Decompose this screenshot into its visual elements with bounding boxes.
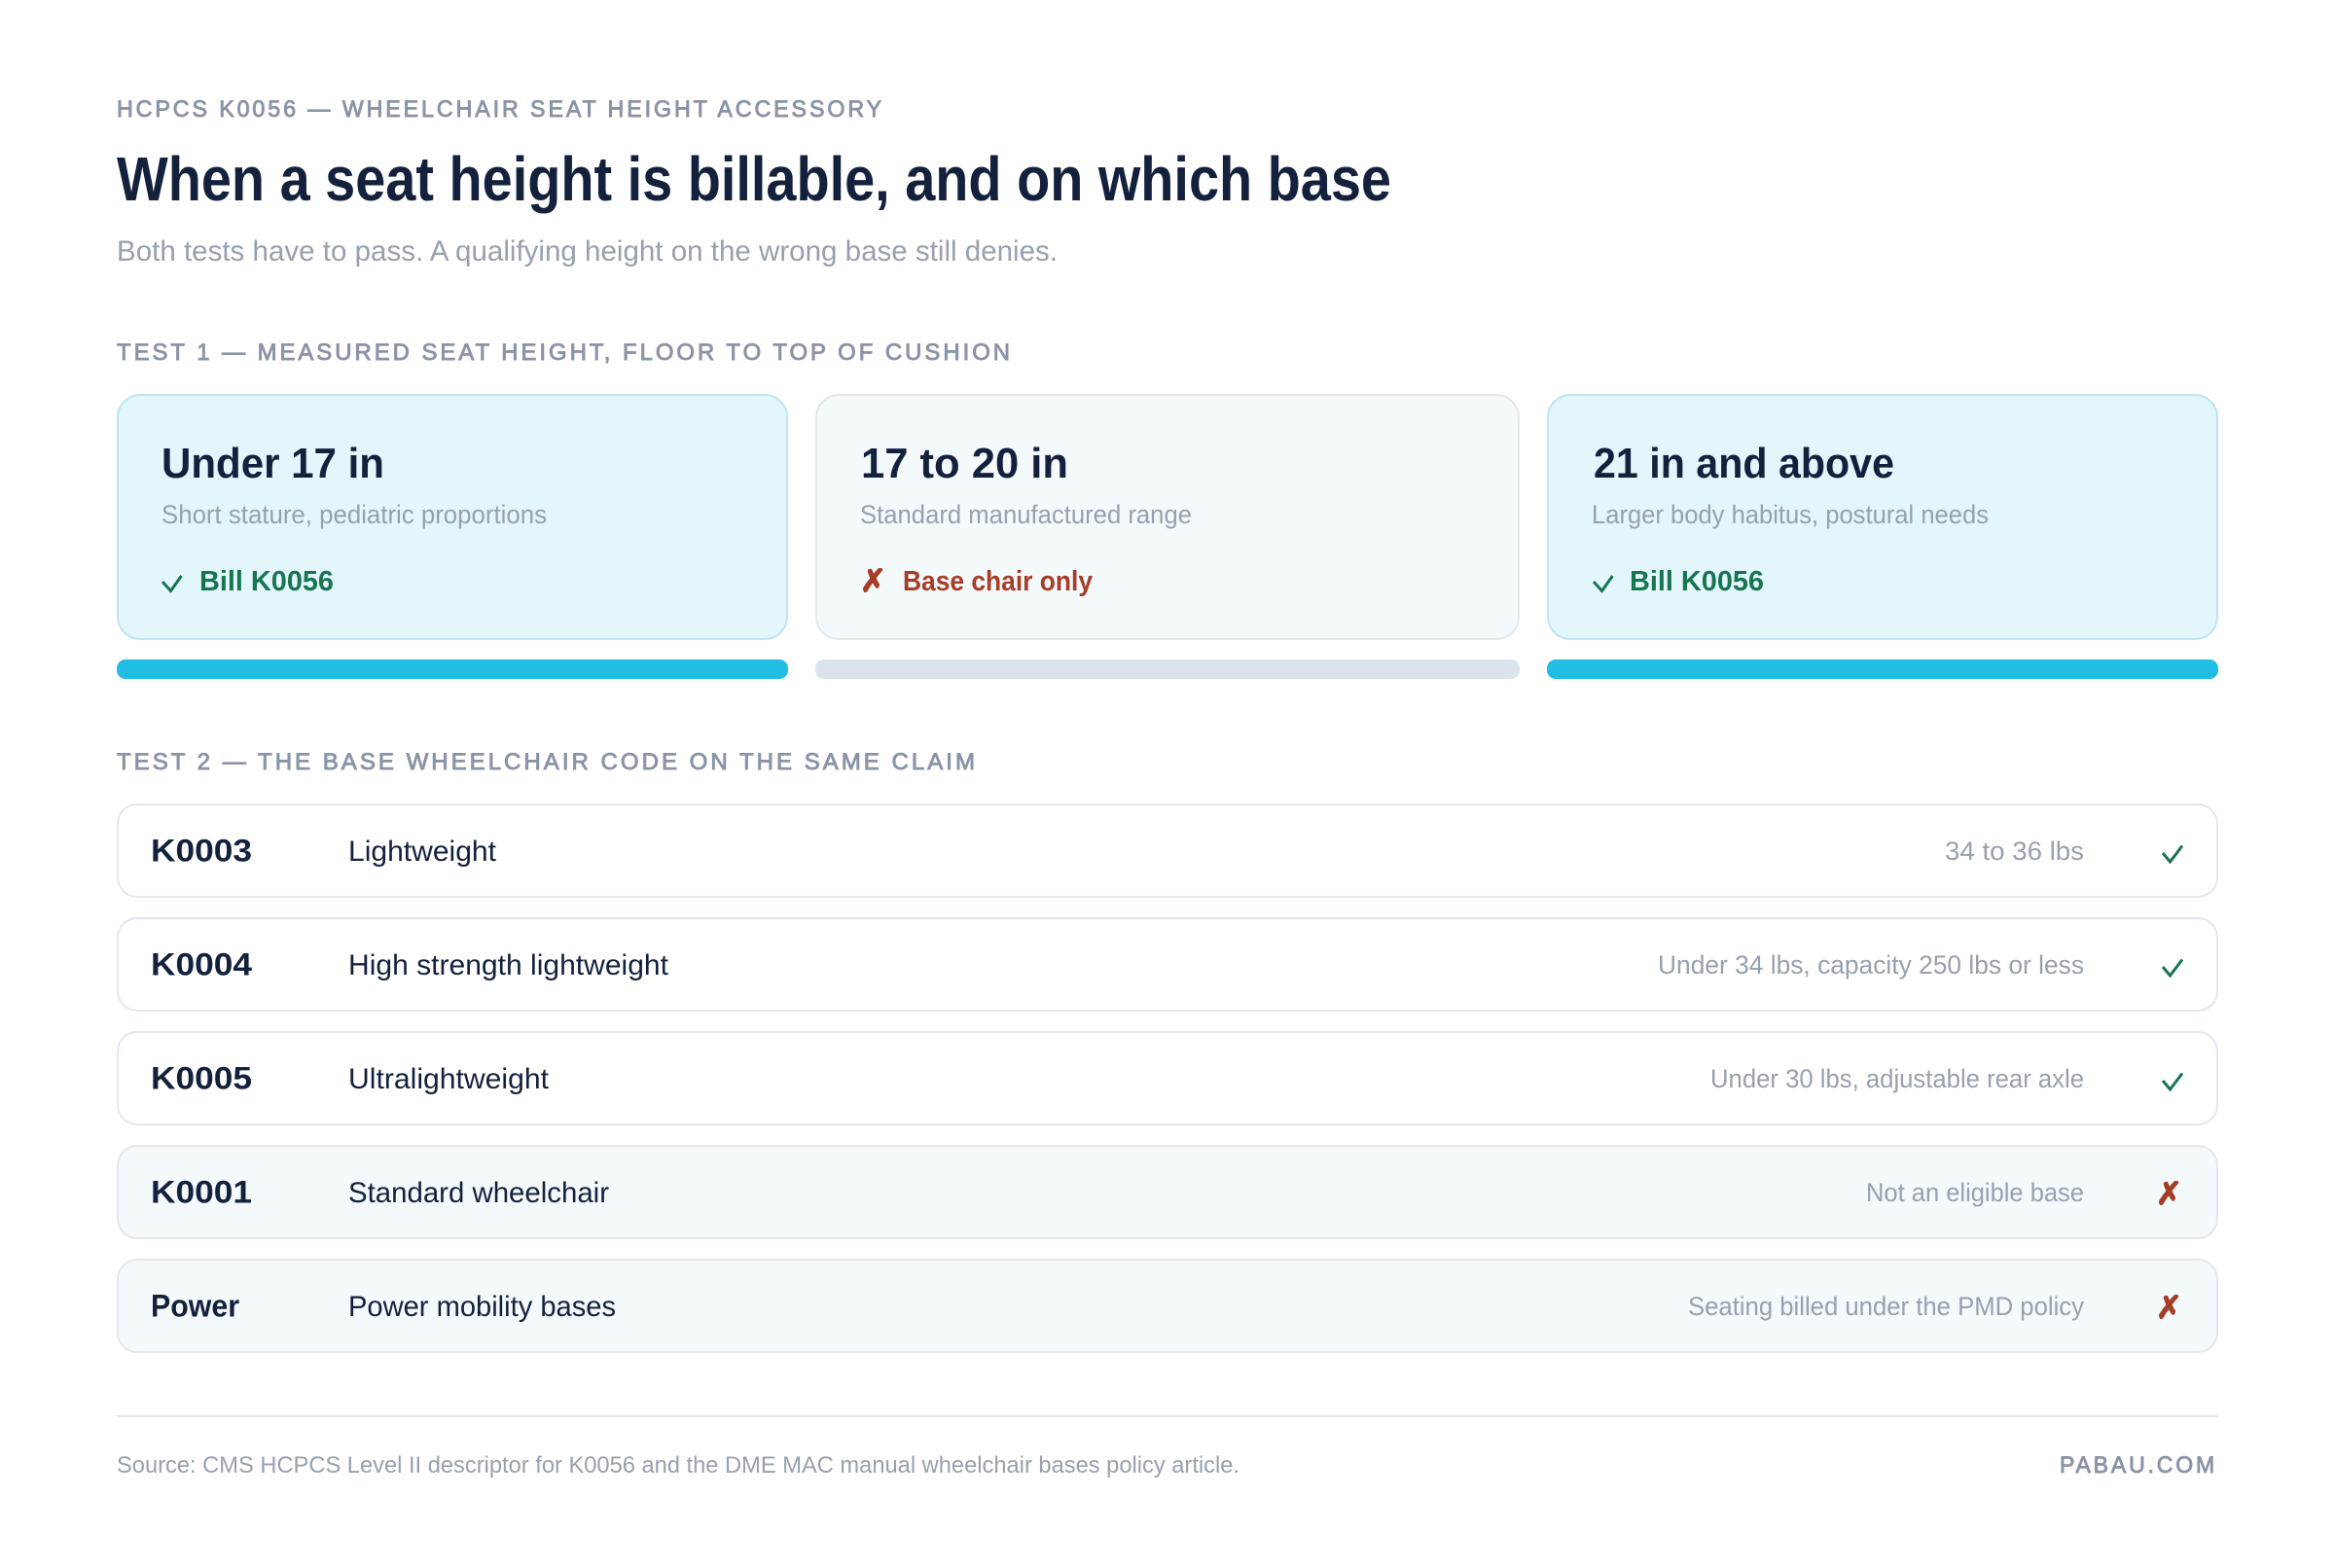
section heading: test 2: TEST 2 — THE BASE WHEELCHAIR CODE ON THE SAME CLAIM <box>117 749 978 775</box>
row background <box>118 1032 2217 1124</box>
detail: Seating billed under the PMD policy <box>1688 1292 2084 1321</box>
name: Standard wheelchair <box>348 1177 609 1209</box>
bar: 21 and above <box>1547 659 2218 679</box>
icon: cross: ✗ <box>860 562 886 599</box>
icon: check <box>2163 1074 2182 1089</box>
verdict: Base chair only <box>903 566 1093 597</box>
source note: Source: CMS HCPCS Level II descriptor for K0056 and the DME MAC manual wheelchair bases policy article. <box>117 1452 1239 1479</box>
brand: PABAU.COM <box>2060 1452 2217 1479</box>
section heading: test 1: TEST 1 — MEASURED SEAT HEIGHT, FLOOR TO TOP OF CUSHION <box>117 339 1013 366</box>
bar: 17 to 20 <box>815 659 1520 679</box>
icon: cross: ✗ <box>2156 1289 2182 1326</box>
row background <box>118 918 2217 1011</box>
row: Power <box>118 1260 2217 1352</box>
row: K0004 <box>118 918 2217 1011</box>
row background <box>118 804 2217 897</box>
verdict: Bill K0056 <box>1630 566 1764 597</box>
card heading: Under 17 in <box>162 440 384 487</box>
subtitle: Both tests have to pass. A qualifying height on the wrong base still denies. <box>117 235 1058 267</box>
detail: 34 to 36 lbs <box>1945 837 2084 866</box>
verdict: Bill K0056 <box>199 566 334 597</box>
code: Power <box>151 1288 239 1323</box>
detail: Not an eligible base <box>1866 1178 2084 1207</box>
detail: Under 34 lbs, capacity 250 lbs or less <box>1658 950 2084 980</box>
card heading: 21 in and above <box>1594 440 1894 487</box>
icon: check <box>162 576 181 591</box>
card background <box>1548 395 2217 639</box>
name: Ultralightweight <box>348 1063 550 1095</box>
eyebrow: HCPCS K0056 — WHEELCHAIR SEAT HEIGHT ACCESSORY <box>117 96 884 123</box>
card background <box>118 395 787 639</box>
row: K0005 <box>118 1032 2217 1124</box>
detail: Under 30 lbs, adjustable rear axle <box>1710 1064 2084 1093</box>
row: K0003 <box>118 804 2217 897</box>
name: Lightweight <box>348 836 497 868</box>
card description: Short stature, pediatric proportions <box>162 500 547 529</box>
card description: Larger body habitus, postural needs <box>1592 500 1989 529</box>
icon: check <box>2163 846 2182 862</box>
row background <box>118 1146 2217 1238</box>
icon: check <box>1594 576 1613 591</box>
row background <box>118 1260 2217 1352</box>
code: K0004 <box>151 947 252 982</box>
panel: 21 in and above <box>1548 395 2217 639</box>
code: K0005 <box>151 1060 252 1095</box>
name: Power mobility bases <box>348 1291 616 1323</box>
panel: 17 to 20 in <box>816 395 1519 639</box>
row: K0001 <box>118 1146 2217 1238</box>
title: When a seat height is billable, and on which base <box>117 144 1391 214</box>
icon: check <box>2163 959 2182 976</box>
card description: Standard manufactured range <box>860 500 1192 529</box>
code: K0003 <box>151 833 252 868</box>
code: K0001 <box>151 1175 252 1210</box>
card background <box>816 395 1519 639</box>
panel: under 17 in <box>118 395 787 639</box>
name: High strength lightweight <box>348 949 669 981</box>
icon: cross: ✗ <box>2156 1175 2182 1212</box>
bar: under 17 <box>117 659 788 679</box>
card heading: 17 to 20 in <box>861 440 1068 487</box>
